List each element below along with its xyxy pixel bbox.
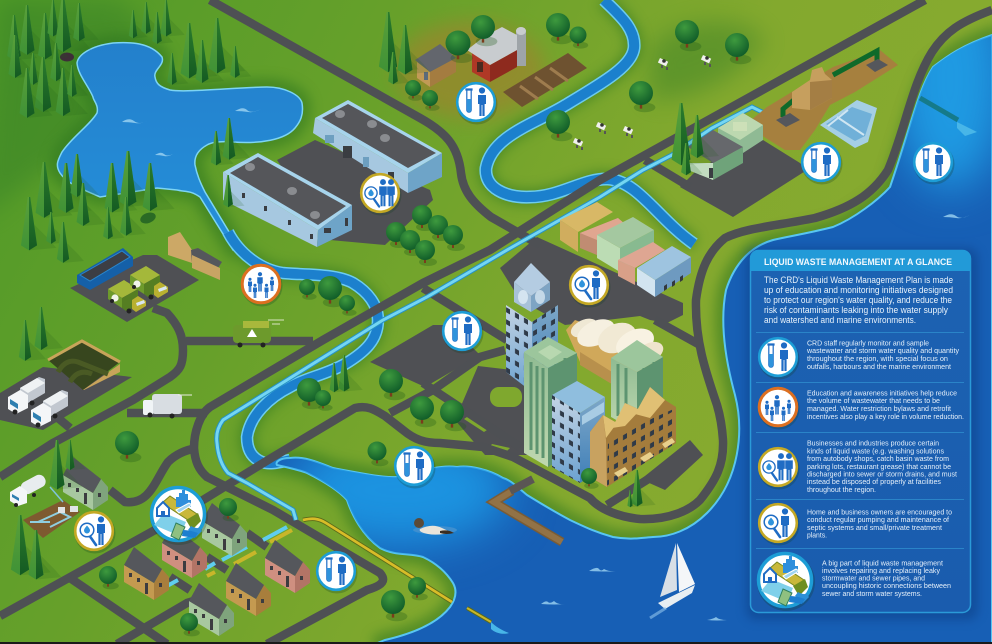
heading: LIQUID WASTE MANAGEMENT AT A GLANCE — [764, 257, 952, 268]
recycling depot building — [168, 232, 222, 280]
treatment plant dirt — [745, 50, 898, 150]
item: education text: managed. Water restriction bylaws and retrofit — [807, 404, 952, 413]
tan apartment building — [590, 387, 676, 487]
icon: downtown monitoring — [442, 312, 484, 354]
item: education text: incentives also play a key role in volume reduction. — [807, 412, 964, 421]
icon: marine monitoring — [914, 143, 954, 184]
icon: warehouse businesses — [360, 174, 402, 216]
parking lots — [0, 140, 807, 500]
item: pipe repairs text: involves repairing and replacing leaky — [822, 566, 940, 575]
item: education text — [807, 388, 964, 421]
icon: septic owners — [74, 512, 116, 554]
stormwater pipe: light blue — [148, 107, 783, 592]
farm: barn, silo, house, field — [415, 27, 587, 107]
item: education text: Education and awareness initiatives help reduce — [807, 388, 957, 398]
intro text: risk of contaminants leaking into the water supply — [764, 305, 949, 315]
blue bins — [77, 248, 133, 290]
item: businesses text: Businesses and industries produce certain — [807, 438, 939, 448]
icon: treatment plant monitoring — [802, 143, 842, 184]
city block lawn — [464, 387, 522, 453]
lake — [57, 43, 303, 250]
round trees — [99, 13, 751, 636]
icon: pipe repairs — [150, 487, 208, 545]
item: home owners text: septic systems and small/private treatment — [807, 523, 943, 532]
farm dirt — [395, 22, 545, 118]
item: home owners text: plants. — [807, 530, 827, 540]
sewer pipe: yellow — [207, 519, 452, 602]
sea and bay — [277, 0, 992, 644]
stadium — [566, 314, 666, 393]
dock — [494, 479, 562, 542]
map medallions — [74, 83, 954, 593]
item: home owners text: conduct regular pumping and maintenance of — [807, 515, 950, 524]
item: pipe repairs text: A big part of liquid waste management — [822, 558, 944, 568]
treatment plant — [688, 51, 888, 180]
panel: liquid waste at a glance — [746, 248, 978, 620]
item: businesses text: kinds of liquid waste (e.g. washing solutions — [807, 446, 944, 456]
land shading hills — [0, 0, 765, 220]
farm river — [486, 0, 694, 244]
bear and bush — [60, 52, 157, 225]
item: pipe repairs text: uncoupling historic connections between — [822, 581, 951, 590]
houses — [63, 457, 310, 636]
intro text: and watershed and marine environments. — [764, 315, 916, 325]
item: businesses text: from autobody shops, catch basin waste from — [807, 454, 949, 463]
cows — [573, 55, 711, 150]
compost bins — [48, 341, 120, 390]
item: businesses text: throughout the region. — [807, 485, 876, 494]
icon: education — [242, 265, 282, 306]
green tower right — [611, 340, 663, 432]
panel header bar — [750, 250, 971, 271]
item: home owners text — [807, 508, 952, 540]
shops row — [560, 202, 691, 297]
icon: farm monitoring — [456, 83, 498, 124]
item: businesses text: discharged into sewer or storm drains, and must — [807, 470, 958, 478]
item: pipe repairs text: stormwater and sewer pipes, and — [822, 574, 925, 582]
white garbage trucks parked — [8, 377, 68, 428]
river from lake through to the bay — [228, 232, 378, 463]
blue tower — [552, 381, 605, 483]
icon: bay monitoring — [394, 447, 436, 488]
recycling truck on road — [233, 320, 284, 348]
item: monitoring text: CRD staff regularly monitor and sample — [807, 338, 929, 348]
conifer trees — [7, 0, 719, 579]
item: businesses text: instead be disposed of properly at facilities — [807, 477, 941, 486]
item: home owners text: Home and business owners are encouraged to — [807, 508, 952, 516]
white truck on road — [143, 394, 192, 418]
sailboat — [650, 543, 695, 618]
septic field — [23, 487, 80, 538]
item: businesses text: parking lots, restaurant grease) that cannot be — [807, 462, 951, 471]
item: monitoring text: throughout the region, with special focus on — [807, 354, 948, 363]
item: pipe repairs text — [822, 558, 951, 598]
item: home owners icon — [758, 504, 800, 546]
intro text: up of education and monitoring initiatives designed — [764, 285, 953, 295]
item: monitoring icon — [758, 338, 800, 380]
green tower left — [524, 337, 577, 467]
item: pipe repairs icon — [757, 553, 815, 611]
icon: neighbourhood monitoring — [316, 552, 358, 594]
intro text — [764, 275, 953, 325]
recycling trucks parked — [108, 266, 168, 314]
otter swimming — [413, 518, 457, 535]
septic truck — [10, 473, 48, 507]
intro text: The CRD's Liquid Waste Management Plan is made — [764, 275, 953, 285]
item: monitoring text: wastewater and storm water quality and quantity — [806, 346, 959, 355]
item: education text: the volume of wastewater that needs to be — [807, 396, 940, 405]
item: businesses text — [807, 438, 958, 494]
clock tower — [506, 263, 558, 392]
item: businesses icon — [758, 448, 800, 490]
icon: city owners — [570, 266, 610, 308]
item: monitoring text: outfalls, harbours and the marine environment — [807, 362, 952, 371]
item: education icon — [758, 388, 800, 430]
warehouses — [223, 100, 442, 247]
bay outfall pipe — [467, 608, 509, 634]
item: pipe repairs text: sewer and storm water systems. — [822, 589, 922, 598]
item: monitoring text — [806, 338, 959, 371]
intro text: to protect our region's water quality, and reduce the — [764, 295, 952, 305]
ocean outfall pipe — [920, 98, 977, 136]
